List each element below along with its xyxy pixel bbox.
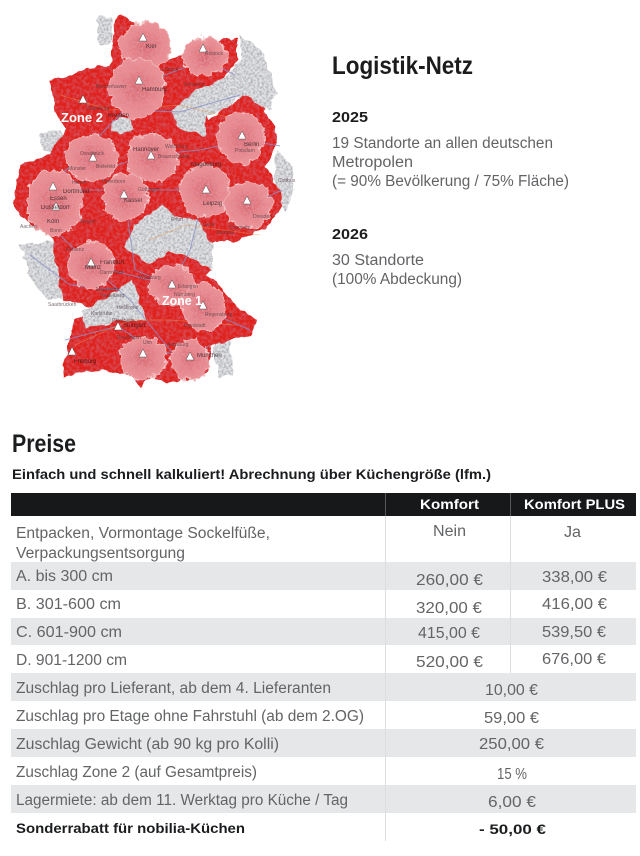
row: Zuschlag Lieferant [16, 680, 538, 699]
map: city labels: Essen [50, 196, 67, 202]
row: B [16, 596, 607, 617]
row: Zuschlag Etage: Zuschlag pro Etage ohne Fahrstuhl (ab dem 2.OG) [16, 708, 364, 725]
map: city labels: Leipzig [203, 201, 222, 207]
map: city labels: Berlin [244, 142, 259, 148]
row: Entpacken: Ja [564, 524, 581, 541]
map: city labels: Würzburg [139, 275, 161, 281]
map: city labels: Saarbrücken [48, 302, 77, 308]
map: city labels: Rostock [205, 51, 224, 57]
row: D [16, 651, 606, 671]
map: city labels: Heilbronn [117, 305, 139, 311]
row: C: C. 601-900 cm [16, 624, 122, 641]
map: city labels: Kassel [124, 198, 142, 204]
map: city labels: Aachen [20, 224, 37, 230]
map: city labels: Dresden [253, 214, 272, 220]
map: city labels: Düsseldorf [41, 205, 70, 211]
map label: Zone 1: Zone 1 [162, 294, 202, 308]
map: city labels [20, 44, 296, 365]
map: city labels: Ingolstadt [184, 323, 206, 329]
map: city labels: Braunschweig [158, 154, 190, 160]
row: Sonderrabatt: Sonderrabatt für nobilia-Küchen [16, 820, 245, 836]
row: A [16, 568, 607, 589]
map: grey areas outside the delivery zones [20, 14, 294, 378]
map: city labels: Bielefeld [96, 164, 115, 170]
table row stripes [11, 562, 636, 813]
row: C: 415,00 € [418, 625, 480, 642]
map: city labels: Münster [68, 166, 86, 172]
row: Lagermiete: 6,00 € [488, 794, 536, 811]
map: grey holes inside the zones [80, 60, 276, 328]
map: city labels: Erlangen [178, 284, 198, 290]
map label: Zone 2: Zone 2 [61, 111, 103, 125]
row: Sonderrabatt [16, 820, 546, 837]
map: city labels: Lübeck [162, 67, 179, 73]
map: city labels: Magdeburg [191, 162, 221, 168]
map: city labels: Koblenz [66, 247, 85, 253]
subheading: Einfach und schnell kalkuliert: Einfach und schnell kalkuliert! Abrechnung über Küchengröße (lfm.) [12, 467, 491, 482]
map: city labels: Hamm [72, 180, 87, 186]
map: city labels: Regensburg [205, 312, 232, 318]
map: city labels: Karlsruhe [91, 311, 113, 317]
row: Entpacken: Verpackungsentsorgung [16, 545, 185, 562]
map: city labels: Freiburg [74, 359, 96, 365]
text block: 2025 details: Metropolen [332, 154, 413, 171]
heading: Logistik-Netz: Logistik-Netz [332, 52, 473, 80]
text block: 2025 details: (= 90% Bevölkerung / 75% Fläche) [332, 173, 569, 190]
map: Zone 1 pink catchment areas [26, 22, 272, 380]
map: city labels: Erfurt [171, 217, 184, 223]
row: A: 260,00 € [416, 572, 483, 589]
row: B: B. 301-600 cm [16, 596, 121, 613]
map: Germany logistics zones [12, 14, 296, 388]
row: Zuschlag Zone 2 [16, 764, 527, 783]
row: B: 320,00 € [416, 600, 482, 617]
map: city labels: Mainz [85, 265, 101, 271]
row: A: A. bis 300 cm [16, 568, 113, 585]
subheading: 2026: 2026 [332, 227, 368, 243]
row: Zuschlag Gewicht [16, 736, 544, 753]
row: Lagermiete [16, 792, 536, 811]
map: city labels: Wolfsburg [165, 144, 188, 150]
panel: price table [11, 493, 636, 841]
row: Entpacken: Nein [433, 523, 466, 540]
row: Zuschlag Gewicht: 250,00 € [479, 736, 544, 753]
map: city labels: Reutlingen [117, 335, 141, 341]
row: Zuschlag Etage: 59,00 € [484, 710, 539, 727]
row: Entpacken: Entpacken, Vormontage Sockelfüße, [16, 525, 270, 542]
map: location triangles [49, 33, 251, 360]
map: city labels: Hamburg [142, 87, 167, 93]
heading: Preise: Preise [12, 430, 76, 458]
row: C: 539,50 € [542, 624, 606, 641]
row: C [16, 624, 606, 642]
subheading: 2025: 2025 [332, 110, 368, 126]
row: B: 416,00 € [542, 596, 607, 613]
map: city labels: Bremerhaven [96, 84, 126, 90]
table header: Komfort PLUS [524, 496, 625, 512]
table column lines [386, 516, 510, 841]
map: city labels: Bonn [50, 228, 62, 234]
map: city labels: Siegen [80, 219, 96, 225]
map: city labels: Oldenburg [86, 106, 110, 112]
map: city labels: Pforzheim [112, 318, 135, 324]
row: D: 676,00 € [542, 651, 606, 668]
map: city labels: Heidelberg [100, 293, 124, 299]
row: Zuschlag Zone 2: Zuschlag Zone 2 (auf Gesamtpreis) [16, 764, 257, 781]
map: city labels: Kiel [146, 44, 156, 50]
row: A: 338,00 € [542, 569, 607, 586]
row: D: D. 901-1200 cm [16, 652, 127, 669]
map: city labels: Ulm [143, 340, 152, 346]
map: city labels: Nürnberg [174, 292, 195, 298]
row: Lagermiete: Lagermiete: ab dem 11. Werktag pro Küche / Tag [16, 792, 348, 809]
row: Sonderrabatt: - 50,00 € [479, 821, 546, 837]
map: city labels: Darmstadt [100, 270, 124, 276]
map: city labels: Bremen [108, 113, 129, 119]
row: Zuschlag Lieferant: 10,00 € [485, 682, 538, 699]
map: city labels: Hannover [133, 147, 159, 153]
map: city labels: Osnabrück [80, 151, 105, 157]
map: city labels: Potsdam [235, 148, 255, 154]
panel: Logistik-Netz text [332, 52, 569, 288]
map: city labels: Augsburg [167, 342, 189, 348]
text block: 2026 details [332, 252, 462, 288]
table header: Komfort [420, 496, 479, 512]
map: city labels: Dortmund [63, 189, 89, 195]
row: Zuschlag Lieferant: Zuschlag pro Lieferant, ab dem 4. Lieferanten [16, 680, 331, 697]
row: Zuschlag Gewicht: Zuschlag Gewicht (ab 90 kg pro Kolli) [16, 736, 279, 753]
map: road network [30, 50, 282, 360]
map: city labels: Chemnitz [229, 225, 251, 231]
text block: 2026 details: 30 Standorte [332, 252, 424, 269]
map: city labels: Paderborn [102, 179, 126, 185]
table header [11, 493, 636, 516]
map: city labels: Frankfurt [100, 260, 124, 266]
map: city labels: Schwerin [184, 82, 205, 88]
row: D: 520,00 € [416, 654, 483, 671]
map: city labels: Cottbus [278, 178, 296, 184]
map: city labels: München [197, 353, 222, 359]
map: city labels: Köln [47, 219, 59, 225]
map: city labels: Zwickau [216, 230, 235, 236]
map: city labels: Gera [203, 222, 214, 228]
map: Zone 2 red area [12, 14, 283, 388]
text block: 2026 details: (100% Abdeckung) [332, 271, 462, 288]
map: city labels: Mannheim [96, 287, 119, 293]
text block: 2025 details [332, 135, 569, 190]
map: city labels: Göttingen [138, 187, 160, 193]
map: city labels: Stuttgart [123, 323, 146, 329]
text block: 2025 details: 19 Standorte an allen deutschen [332, 135, 553, 152]
row: Entpacken [16, 523, 581, 562]
row: Zuschlag Etage [16, 708, 539, 727]
row: Zuschlag Zone 2: 15 % [497, 766, 527, 783]
